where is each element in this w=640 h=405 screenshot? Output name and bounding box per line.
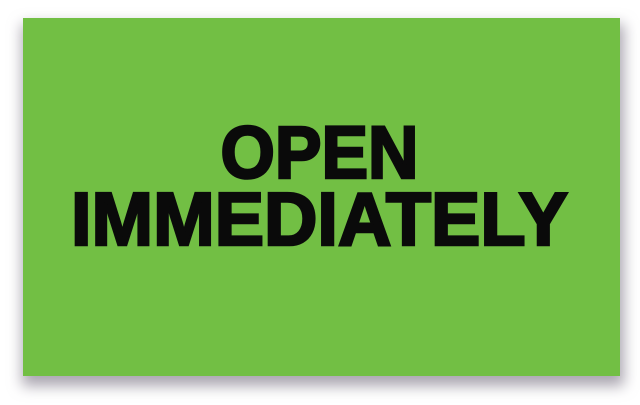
- heading line: IMMEDIATELY: IMMEDIATELY: [71, 177, 568, 261]
- heading line: OPEN: OPEN: [220, 111, 418, 194]
